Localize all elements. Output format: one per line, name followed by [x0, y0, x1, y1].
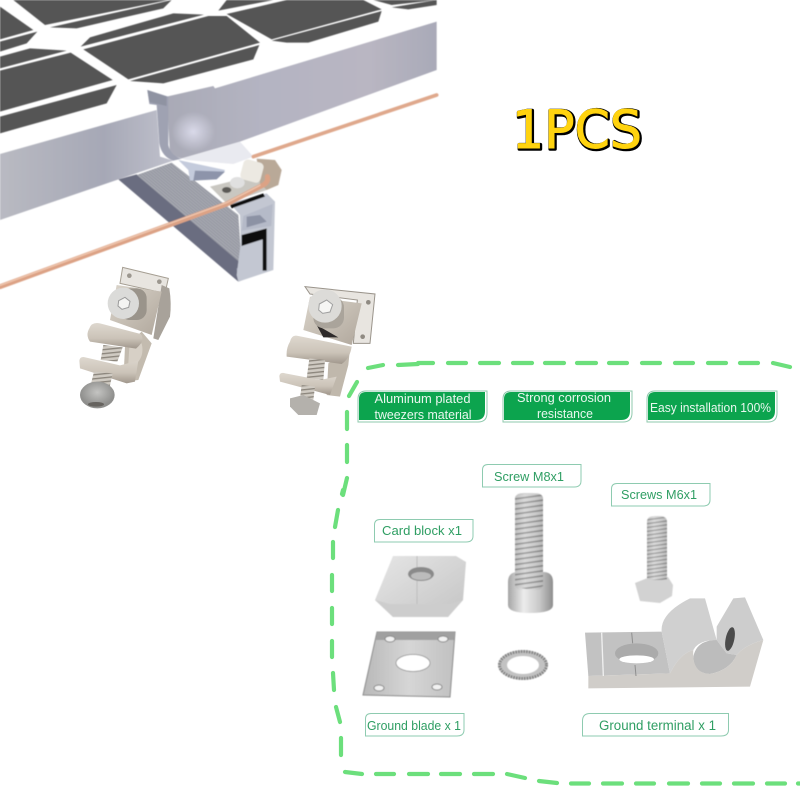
label: Ground terminal x 1: Ground terminal x 1 — [599, 718, 716, 733]
solar cells — [0, 0, 437, 133]
badge: aluminum plated tweezers material: Aluminum plated — [374, 392, 471, 406]
badge: easy installation 100%: Easy installation 100% — [650, 401, 771, 415]
label: Screws M6x1: Screws M6x1 — [621, 487, 697, 502]
panel frame — [0, 22, 437, 220]
badge: aluminum plated tweezers material — [358, 391, 487, 422]
part: card block nut — [375, 556, 466, 617]
label: Card block x1: Card block x1 — [382, 523, 462, 538]
copper ground wire — [0, 95, 437, 287]
badge: strong corrosion resistance: resistance — [537, 407, 593, 421]
label: Ground blade x 1 — [366, 714, 464, 736]
title: 1PCS: 1PCS — [512, 100, 642, 161]
badge: strong corrosion resistance — [503, 391, 632, 422]
label: Screw M8x1: Screw M8x1 — [494, 469, 564, 484]
label: Ground terminal x 1 — [582, 714, 728, 736]
label: Screws M6x1 — [612, 484, 710, 506]
clamp on rail — [178, 158, 282, 208]
part: ground terminal — [585, 597, 763, 688]
photo: grounding clamp, hex bolt — [279, 287, 375, 415]
part: M8 screw — [508, 493, 553, 613]
badge: aluminum plated tweezers material: tweezers material — [374, 408, 472, 422]
panel: dashed green parts border — [332, 363, 800, 784]
label: Screw M8x1 — [482, 464, 581, 487]
part: serrated washer — [498, 650, 548, 680]
label: Ground blade x 1: Ground blade x 1 — [367, 718, 461, 733]
badge: easy installation 100% — [647, 391, 777, 422]
part: ground blade — [363, 632, 455, 697]
mounting rail — [118, 163, 275, 282]
badge: strong corrosion resistance: Strong corrosion — [517, 391, 611, 405]
photo: grounding clamp, socket-head bolt — [79, 267, 171, 408]
label: Card block x1 — [374, 520, 473, 542]
photo: solar panel mounted on rail with copper ground wire — [0, 0, 437, 287]
part: M6 screw — [635, 516, 673, 603]
title: 1PCS: 1PCS — [513, 101, 643, 162]
